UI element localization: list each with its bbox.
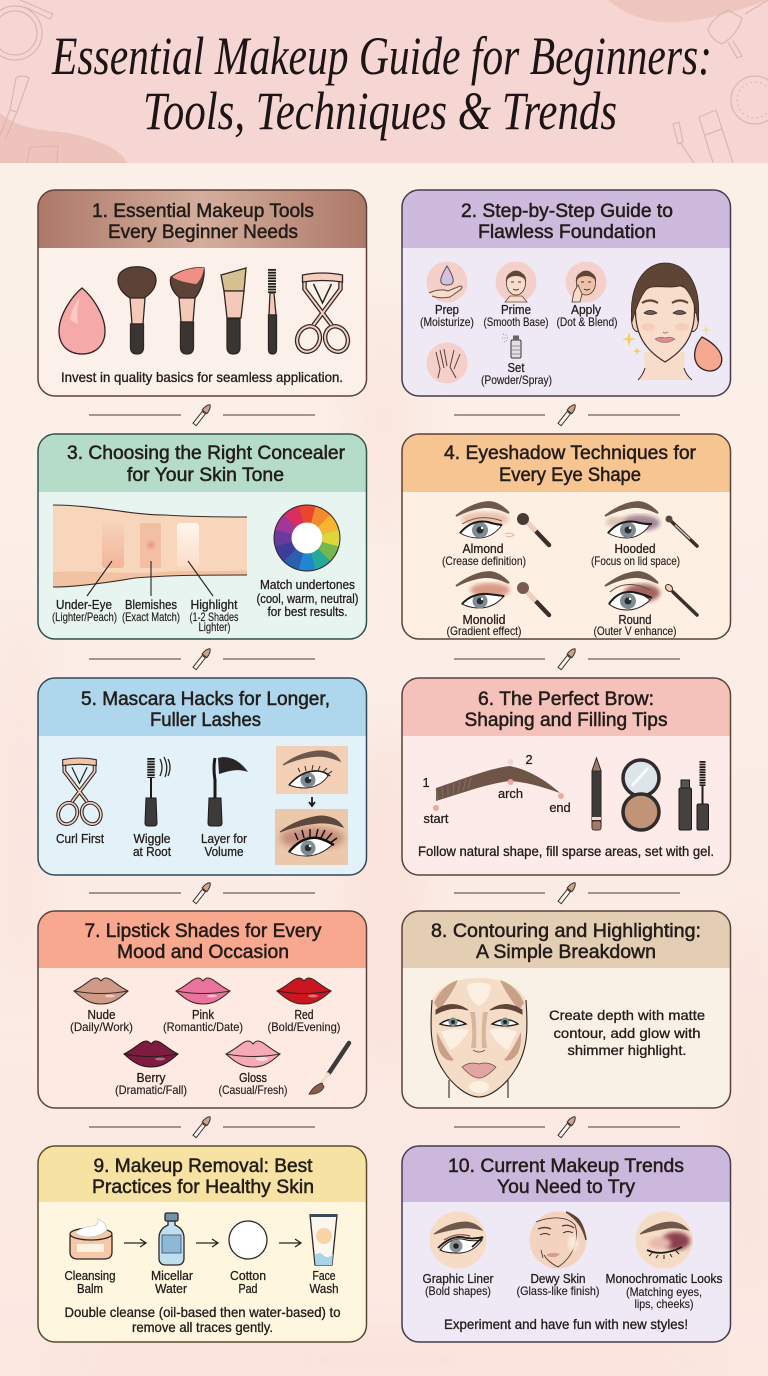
title text bbox=[51, 26, 712, 141]
lips: red: (Bold/Evening) bbox=[268, 1020, 340, 1034]
eye: round bbox=[594, 572, 677, 638]
panel 2: foundation bbox=[402, 190, 730, 396]
label: blemishes bbox=[122, 597, 180, 624]
lips: berry bbox=[115, 1041, 187, 1097]
lips: berry: Berry bbox=[136, 1070, 166, 1085]
caption 1: Invest in quality basics for seamless application. bbox=[61, 369, 343, 385]
lips: berry: (Dramatic/Fall) bbox=[115, 1083, 187, 1097]
panel 4: eyeshadow bbox=[402, 434, 730, 639]
eye: hooded: (Focus on lid space) bbox=[591, 554, 680, 568]
arrow bbox=[124, 1239, 146, 1247]
trend: monochromatic looks bbox=[606, 1212, 722, 1311]
lips: gloss bbox=[218, 1041, 288, 1097]
trend: monochromatic looks: Monochromatic Looks bbox=[606, 1271, 722, 1286]
step: curl first: Curl First bbox=[56, 831, 104, 846]
step: wiggle at root: Wiggle bbox=[134, 831, 170, 846]
heading 4: Every Eye Shape bbox=[499, 464, 641, 486]
caption 8 bbox=[549, 1007, 705, 1058]
label: highlight bbox=[190, 597, 238, 634]
illustration: arm swatches bbox=[53, 505, 247, 596]
heading 5: Fuller Lashes bbox=[150, 709, 261, 731]
step: cotton pad: Cotton bbox=[230, 1268, 266, 1283]
step: face wash: Wash bbox=[310, 1281, 338, 1296]
step: micellar water: Micellar bbox=[151, 1268, 194, 1283]
brow diagram: 1 bbox=[422, 775, 430, 790]
brow diagram: start bbox=[424, 811, 449, 826]
step: prime bbox=[484, 262, 548, 329]
icon: colour wheel bbox=[273, 504, 341, 572]
trend: graphic liner: Graphic Liner bbox=[422, 1271, 494, 1286]
lips: gloss: (Casual/Fresh) bbox=[218, 1083, 288, 1097]
panel 6: brows bbox=[402, 678, 730, 875]
heading 10: 10. Current Makeup Trends bbox=[448, 1155, 684, 1177]
step: prep: Prep bbox=[435, 302, 459, 317]
heading 1: Every Beginner Needs bbox=[108, 221, 298, 243]
heading 1: 1. Essential Makeup Tools bbox=[92, 200, 314, 222]
heading 7: 7. Lipstick Shades for Every bbox=[84, 920, 322, 942]
panel 1: essential tools bbox=[38, 190, 366, 396]
icon: angled brush bbox=[170, 268, 204, 354]
lips: red bbox=[268, 978, 340, 1034]
eye: almond bbox=[442, 502, 526, 568]
icon: powder brush bbox=[118, 267, 156, 354]
step: cotton pad bbox=[229, 1221, 267, 1296]
step: cleansing balm: Balm bbox=[77, 1281, 103, 1296]
trend: monochromatic looks: lips, cheeks) bbox=[634, 1297, 694, 1311]
heading 2: 2. Step-by-Step Guide to bbox=[461, 200, 673, 222]
heading 9: Practices for Healthy Skin bbox=[92, 1176, 314, 1198]
eye: monolid: Monolid bbox=[462, 612, 506, 627]
heading 3 bbox=[67, 442, 345, 486]
icon: brow powder compact bbox=[623, 760, 659, 830]
trend: monochromatic looks: (Matching eyes, bbox=[626, 1285, 702, 1299]
heading 6: 6. The Perfect Brow: bbox=[478, 688, 654, 710]
label: under-eye: Under-Eye bbox=[56, 597, 112, 612]
panel 7: lipstick bbox=[38, 911, 366, 1108]
icon: monolid brush bbox=[517, 582, 549, 615]
heading 5 bbox=[81, 688, 330, 731]
icon: spoolie bbox=[268, 269, 276, 354]
arrow bbox=[279, 1239, 301, 1247]
eye: monolid bbox=[446, 572, 522, 638]
eye: almond: Almond bbox=[462, 541, 504, 556]
caption 3: (cool, warm, neutral) bbox=[256, 591, 358, 606]
lips: nude: (Daily/Work) bbox=[70, 1020, 133, 1034]
brow diagram: end bbox=[549, 800, 571, 815]
eye: hooded bbox=[591, 502, 680, 568]
panel 5: mascara bbox=[38, 678, 366, 875]
divider row 3 bbox=[89, 881, 680, 904]
caption 9 bbox=[64, 1304, 341, 1335]
before and after lashes bbox=[275, 746, 348, 865]
step: curl first bbox=[55, 758, 104, 846]
label: highlight: Highlight bbox=[190, 597, 238, 612]
eye: round: (Outer V enhance) bbox=[594, 624, 677, 638]
heading 10 bbox=[448, 1155, 684, 1198]
lips: pink: Pink bbox=[192, 1007, 215, 1022]
lips: pink: (Romantic/Date) bbox=[163, 1020, 243, 1034]
caption 3: Match undertones bbox=[260, 577, 355, 592]
eye: hooded: Hooded bbox=[614, 541, 656, 556]
eye: round: Round bbox=[618, 612, 652, 627]
caption 9: Double cleanse (oil-based then water-based) to bbox=[64, 1304, 341, 1320]
brow diagram bbox=[422, 752, 571, 826]
heading 3: 3. Choosing the Right Concealer bbox=[67, 442, 345, 464]
icon: almond brush bbox=[517, 513, 549, 545]
icon: lip brush bbox=[309, 1043, 349, 1094]
divider row 4 bbox=[89, 1115, 680, 1138]
heading 6: Shaping and Filling Tips bbox=[464, 709, 668, 731]
divider row 1 bbox=[89, 403, 680, 426]
step: blend hands bbox=[426, 342, 468, 384]
lips: gloss: Gloss bbox=[239, 1070, 267, 1085]
step: apply: Apply bbox=[571, 302, 602, 317]
lips: nude bbox=[70, 978, 133, 1034]
heading 4 bbox=[444, 442, 696, 486]
panel 3: concealer bbox=[38, 434, 366, 639]
arrow bbox=[196, 1239, 218, 1247]
step: prime: (Smooth Base) bbox=[484, 315, 548, 329]
step: set spray: Set bbox=[508, 360, 525, 375]
label: highlight: (1-2 Shades bbox=[190, 610, 238, 624]
step: cleansing balm bbox=[64, 1219, 116, 1296]
label: under-eye bbox=[52, 597, 117, 624]
caption 3 bbox=[256, 577, 358, 619]
heading 5: 5. Mascara Hacks for Longer, bbox=[81, 688, 330, 710]
step: cleansing balm: Cleansing bbox=[64, 1268, 116, 1283]
heading 8 bbox=[431, 920, 701, 963]
caption 8: shimmer highlight. bbox=[568, 1042, 686, 1058]
label: highlight: Lighter) bbox=[198, 620, 231, 634]
panel 10: trends bbox=[402, 1146, 730, 1342]
heading 8: A Simple Breakdown bbox=[476, 941, 656, 963]
caption 3: for best results. bbox=[268, 604, 348, 619]
heading 7: Mood and Occasion bbox=[117, 941, 289, 963]
caption 8: contour, add glow with bbox=[554, 1025, 700, 1041]
heading 4: 4. Eyeshadow Techniques for bbox=[444, 442, 696, 464]
label: under-eye: (Lighter/Peach) bbox=[52, 610, 117, 624]
heading 1 bbox=[92, 200, 314, 243]
lips: pink bbox=[163, 978, 243, 1034]
step: layer for volume bbox=[201, 757, 248, 859]
step: layer for volume: Layer for bbox=[201, 831, 248, 846]
step: prep: (Moisturize) bbox=[420, 315, 474, 329]
icon: sparkles and sponge bbox=[622, 324, 722, 371]
step: wiggle at root: at Root bbox=[133, 844, 171, 859]
trend: graphic liner bbox=[422, 1212, 494, 1298]
step: micellar water bbox=[151, 1213, 194, 1296]
step: set spray: (Powder/Spray) bbox=[481, 373, 552, 387]
heading 9 bbox=[92, 1155, 314, 1198]
trend: graphic liner: (Bold shapes) bbox=[425, 1284, 491, 1298]
panel 8: contouring bbox=[402, 911, 730, 1108]
step: prep bbox=[420, 262, 474, 329]
caption 9: remove all traces gently. bbox=[132, 1319, 273, 1335]
heading 9: 9. Makeup Removal: Best bbox=[94, 1155, 313, 1177]
step: wiggle at root bbox=[133, 757, 171, 859]
caption 6: Follow natural shape, fill sparse areas, set with gel. bbox=[418, 843, 714, 859]
caption 10: Experiment and have fun with new styles! bbox=[444, 1316, 688, 1332]
label: blemishes: (Exact Match) bbox=[122, 610, 180, 624]
heading 10: You Need to Try bbox=[497, 1176, 635, 1198]
heading 6 bbox=[464, 688, 668, 731]
heading 7 bbox=[84, 920, 322, 963]
trend: dewy skin: Dewy Skin bbox=[530, 1271, 586, 1286]
title banner bbox=[0, 0, 768, 163]
eye: almond: (Crease definition) bbox=[442, 554, 526, 568]
trend: dewy skin: (Glass-like finish) bbox=[516, 1284, 600, 1298]
divider row 2 bbox=[89, 647, 680, 670]
decorative makeup line art bbox=[0, 0, 768, 163]
label: blemishes: Blemishes bbox=[125, 597, 177, 612]
trend: dewy skin bbox=[516, 1212, 600, 1298]
step: face wash bbox=[310, 1214, 338, 1296]
icon: beauty sponge bbox=[59, 288, 105, 354]
illustration: woman's face bbox=[631, 263, 699, 380]
step: face wash: Face bbox=[312, 1268, 336, 1283]
caption 8: Create depth with matte bbox=[549, 1007, 705, 1023]
lips: nude: Nude bbox=[88, 1007, 116, 1022]
icon: down arrow bbox=[309, 797, 315, 806]
lips: red: Red bbox=[294, 1007, 314, 1022]
panel 9: removal bbox=[38, 1146, 366, 1342]
step: prime: Prime bbox=[501, 302, 531, 317]
heading 3: for Your Skin Tone bbox=[127, 464, 284, 486]
title text: Tools, Techniques & Trends bbox=[143, 81, 617, 141]
icon: brow gel bbox=[679, 761, 708, 830]
eye: monolid: (Gradient effect) bbox=[446, 624, 522, 638]
heading 2 bbox=[461, 200, 673, 243]
illustration: contour face bbox=[430, 978, 528, 1098]
brow diagram: arch bbox=[498, 786, 523, 801]
icon: hooded brush bbox=[666, 516, 697, 546]
icon: eyelash curler bbox=[293, 273, 352, 355]
step: apply: (Dot & Blend) bbox=[556, 315, 618, 329]
icon: flat foundation brush bbox=[221, 268, 246, 354]
heading 8: 8. Contouring and Highlighting: bbox=[431, 920, 701, 942]
heading 2: Flawless Foundation bbox=[478, 221, 656, 243]
step: layer for volume: Volume bbox=[204, 844, 244, 859]
icon: brow pencil bbox=[592, 758, 601, 830]
step: micellar water: Water bbox=[155, 1281, 188, 1296]
step: apply bbox=[556, 262, 618, 329]
brow diagram: 2 bbox=[525, 752, 533, 767]
icon: round brush bbox=[664, 583, 697, 615]
step: set spray bbox=[481, 334, 552, 387]
step: cotton pad: Pad bbox=[238, 1281, 258, 1296]
